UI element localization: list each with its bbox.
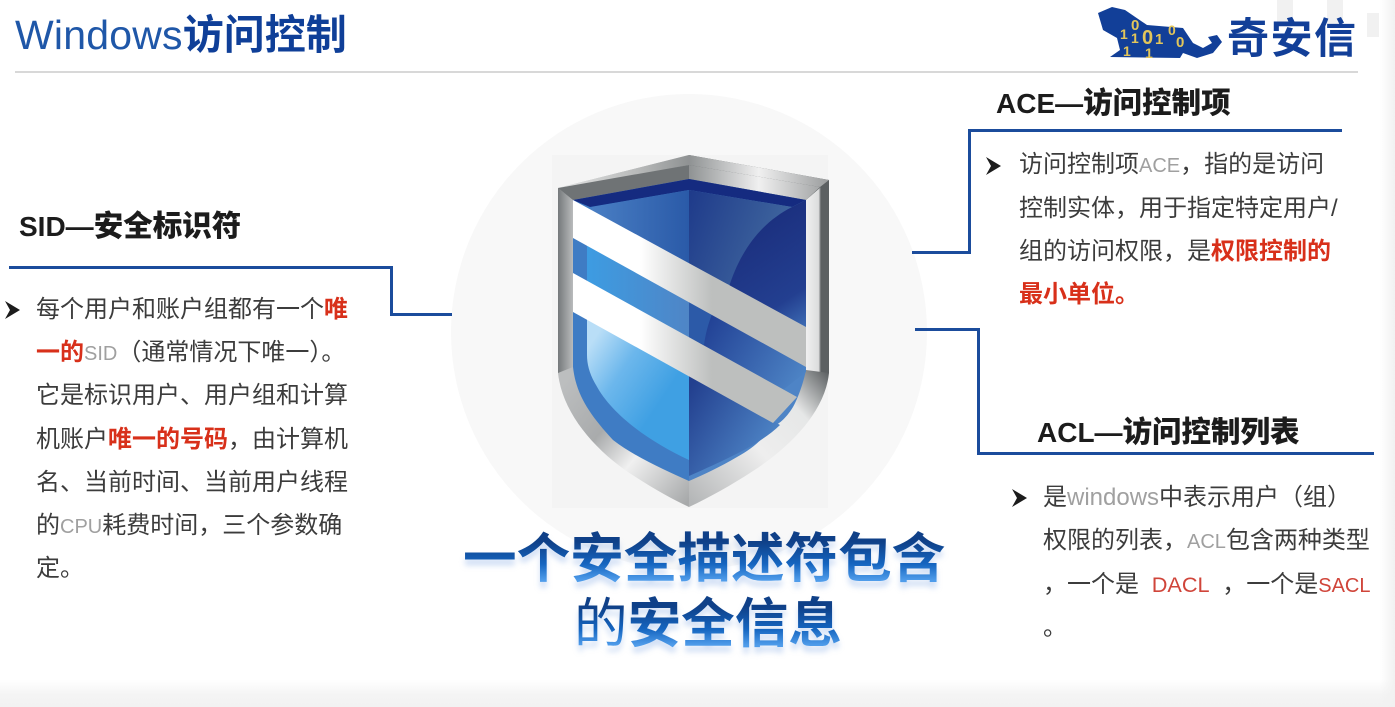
background circle bbox=[451, 94, 927, 570]
ACE body text: 最小单位。 bbox=[1019, 281, 1139, 308]
logo: Qi An Xin: 0 bbox=[1131, 17, 1139, 34]
ACE body text: 控制实体，用于指定特定用户/ bbox=[1019, 195, 1338, 222]
SID heading: SID—安全标识符 bbox=[19, 210, 241, 243]
ACE body text: 组的访问权限，是权限控制的 bbox=[1019, 238, 1331, 265]
panel: SID bbox=[5, 210, 452, 582]
title: Windows访问控制 bbox=[15, 12, 347, 58]
shield backdrop bbox=[552, 155, 828, 508]
panel: ACL bbox=[915, 328, 1374, 641]
header rule bbox=[15, 71, 1358, 73]
SID body text: 它是标识用户、用户组和计算 bbox=[36, 382, 348, 409]
SID body text: 机账户唯一的号码，由计算机 bbox=[36, 426, 348, 453]
watermark bbox=[1277, 0, 1379, 37]
logo: Qi An Xin bbox=[1098, 7, 1358, 62]
ACE body text bbox=[986, 151, 1338, 308]
ACE connector line bbox=[912, 129, 1342, 254]
SID connector line bbox=[9, 266, 452, 316]
SID body text: 每个用户和账户组都有一个唯 bbox=[36, 296, 348, 323]
blue face bbox=[573, 179, 806, 481]
ACL body text: 权限的列表，ACL包含两种类型 bbox=[1043, 527, 1370, 554]
shield icon bbox=[558, 155, 829, 507]
icon: bullet arrow bbox=[986, 157, 1001, 175]
logo: Qi An Xin: 0 bbox=[1176, 34, 1184, 51]
ACL body text: ，一个是 DACL ，一个是SACL bbox=[1043, 571, 1370, 598]
SID body text: 定。 bbox=[36, 555, 84, 582]
right edge shade bbox=[1380, 0, 1395, 707]
stripes bbox=[573, 200, 806, 423]
logo: Qi An Xin: 0 bbox=[1168, 22, 1176, 38]
ACL body text bbox=[1012, 484, 1370, 641]
logo: Qi An Xin: 1 bbox=[1131, 30, 1139, 46]
SID body text: 一的SID（通常情况下唯一）。 bbox=[36, 339, 345, 366]
ACL body text: 。 bbox=[1043, 614, 1067, 641]
logo: Qi An Xin: 1 bbox=[1123, 43, 1131, 59]
SID body text: 的CPU耗费时间，三个参数确 bbox=[36, 512, 342, 539]
ACL heading: ACL—访问控制列表 bbox=[1037, 416, 1300, 449]
ACL connector line bbox=[915, 328, 1374, 455]
panel: ACE bbox=[912, 87, 1342, 308]
logo: Qi An Xin: 奇安信 bbox=[1227, 15, 1358, 62]
ACL body text: 是windows中表示用户（组） bbox=[1043, 484, 1351, 511]
logo: Qi An Xin: 0 bbox=[1142, 27, 1153, 49]
logo: Qi An Xin: 1 bbox=[1120, 26, 1128, 42]
logo: Qi An Xin: 1 bbox=[1145, 45, 1153, 61]
SID body text: 名、当前时间、当前用户线程 bbox=[36, 469, 348, 496]
frame bbox=[558, 155, 829, 507]
center heading bbox=[463, 529, 945, 656]
ACE heading: ACE—访问控制项 bbox=[996, 87, 1231, 120]
icon: bullet arrow bbox=[1012, 489, 1027, 507]
ACE body text: 访问控制项ACE，指的是访问 bbox=[1019, 151, 1324, 178]
icon: bullet arrow bbox=[5, 301, 20, 319]
center heading: 一个安全描述符包含 bbox=[463, 529, 945, 589]
SID body text bbox=[5, 296, 348, 582]
logo: Qi An Xin: 1 bbox=[1155, 31, 1163, 48]
